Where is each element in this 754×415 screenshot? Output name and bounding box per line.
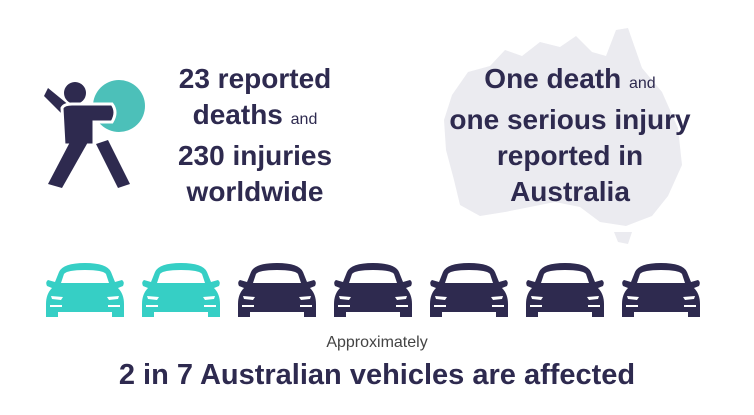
headline: 2 in 7: 2 in 7 Australian vehicles are affected xyxy=(119,359,635,391)
text: worldwide stats: 230 injuries xyxy=(178,140,332,171)
text: Australia stats: one serious injury xyxy=(449,104,691,135)
text: Australia stats: reported in xyxy=(497,140,643,171)
text: worldwide stats: deaths and xyxy=(193,99,317,130)
text: approximately: Approximately xyxy=(326,334,428,351)
text: Australia stats: Australia xyxy=(510,176,630,207)
text: Australia stats: One death and xyxy=(484,63,656,94)
text: worldwide stats: worldwide xyxy=(187,176,323,207)
text: worldwide stats xyxy=(178,63,332,207)
cars row xyxy=(46,263,700,317)
text: worldwide stats: 23 reported xyxy=(179,63,331,94)
text: Australia stats xyxy=(449,63,691,207)
icon: person with ball xyxy=(44,80,145,188)
